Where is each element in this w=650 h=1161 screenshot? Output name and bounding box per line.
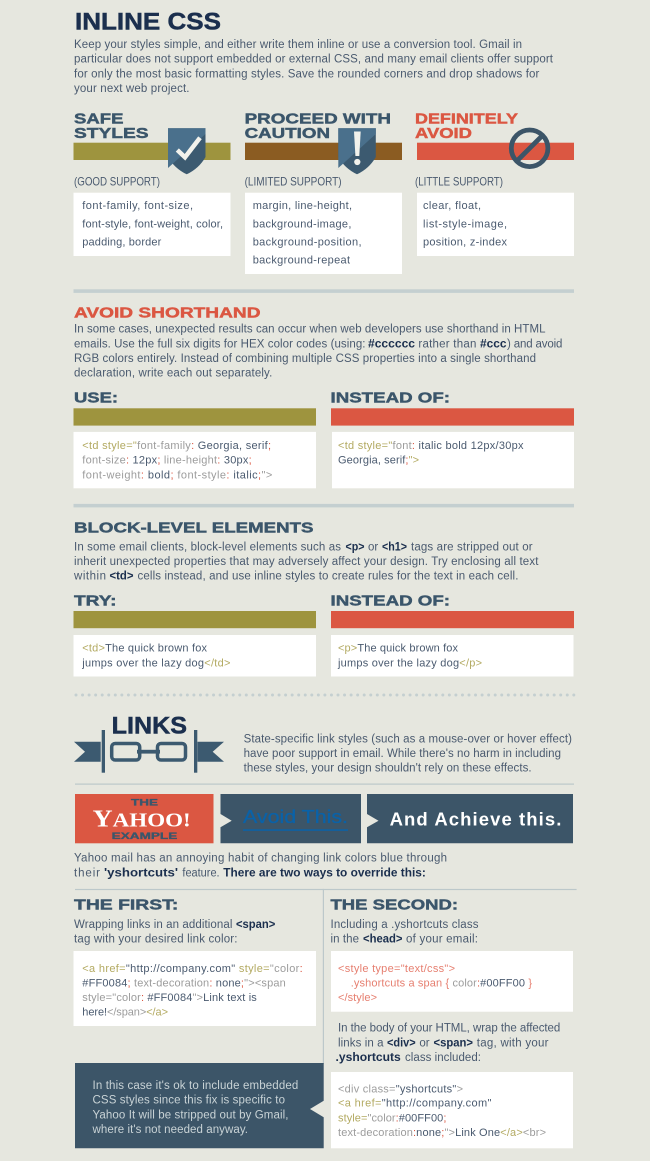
column: instead of: INSTEAD OF: xyxy=(330,390,450,406)
intro paragraph: your next web project. xyxy=(74,83,190,95)
column: instead of xyxy=(330,593,574,676)
paragraph: ) and avoid xyxy=(507,338,562,350)
paragraph xyxy=(74,324,562,380)
heading: proceed with caution: PROCEED WITH xyxy=(245,111,391,127)
paragraph: declaration, write each out separately. xyxy=(74,368,272,380)
paragraph: #cccccc xyxy=(368,338,416,350)
list box: list-style-image, xyxy=(423,218,507,230)
column: try: <td>The quick brown fox xyxy=(82,643,208,655)
paragraph: rather than xyxy=(418,338,476,350)
code box: div: style="color:#00FF00; xyxy=(338,1112,446,1124)
text block: class included: xyxy=(405,1052,481,1064)
code box: #FF0084; text-decoration: none;"><span xyxy=(82,977,286,989)
callout: embedded css note: where it's not needed anyway. xyxy=(92,1124,248,1136)
red bar xyxy=(417,143,574,160)
panel: yahoo logo: THE xyxy=(131,797,158,808)
text block xyxy=(336,1023,560,1064)
paragraph: tags are stripped out or xyxy=(411,541,533,553)
paragraph xyxy=(244,733,572,775)
text block: In the body of your HTML, wrap the affected xyxy=(338,1023,560,1035)
icon: shield with exclamation xyxy=(338,128,376,174)
panel: the second xyxy=(330,898,573,1148)
text block xyxy=(330,919,479,946)
callout: embedded css note: CSS styles since this fix is specific to xyxy=(92,1095,285,1107)
text block: <div> xyxy=(387,1037,416,1049)
list box: background-repeat xyxy=(253,254,350,266)
olive bar xyxy=(74,143,230,160)
label: good support: (GOOD SUPPORT) xyxy=(74,174,160,188)
column: use: USE: xyxy=(74,390,118,406)
code box xyxy=(74,951,316,1026)
column: try: TRY: xyxy=(74,593,116,609)
text block xyxy=(74,919,276,946)
heading: definitely avoid: DEFINITELY xyxy=(415,111,518,127)
paragraph: or xyxy=(368,541,378,553)
paragraph: State-specific link styles (such as a mouse-over or hover effect) xyxy=(244,733,572,745)
column: use: font-size: 12px; line-height: 30px; xyxy=(82,455,252,467)
list box xyxy=(245,193,402,274)
text block: <span> xyxy=(434,1037,473,1049)
panel: and achieve this xyxy=(367,794,573,843)
title: INLINE CSS xyxy=(75,8,221,35)
text block: tag, with your xyxy=(477,1037,549,1049)
icon: links banner with chain: LINKS xyxy=(112,712,187,740)
heading: the second: THE SECOND: xyxy=(330,898,458,914)
text block: Including a .yshortcuts class xyxy=(330,919,479,931)
panel: and achieve this: And Achieve this. xyxy=(390,809,561,830)
code box: div xyxy=(331,1072,573,1148)
brown bar xyxy=(245,143,402,160)
section: block-level elements xyxy=(73,520,574,676)
yahoo example banner xyxy=(75,794,573,843)
callout: embedded css note: In this case it's ok to include embedded xyxy=(92,1080,298,1092)
column: try: jumps over the lazy dog</td> xyxy=(81,657,230,669)
panel: the first xyxy=(74,898,316,1026)
panel: definitely avoid xyxy=(415,111,574,256)
column: try xyxy=(74,593,316,676)
column: instead of: jumps over the lazy dog</p> xyxy=(337,657,482,669)
text block: tag with your desired link color: xyxy=(74,934,238,946)
paragraph: <p> xyxy=(346,541,365,553)
icon: shield with check xyxy=(168,128,206,174)
column: instead of: INSTEAD OF: xyxy=(330,593,450,609)
code box: <a href="http://company.com" style="color: xyxy=(82,963,303,975)
heading: avoid shorthand: AVOID SHORTHAND xyxy=(74,306,260,322)
list box: margin, line-height, xyxy=(253,200,352,212)
heading: block-level elements: BLOCK-LEVEL ELEMENTS xyxy=(74,520,314,536)
paragraph: emails. Use the full six digits for HEX color codes (using: xyxy=(74,338,366,350)
column: instead of: <td style="font: italic bold 12px/30px xyxy=(338,440,524,452)
paragraph: have poor support in email. While there's no harm in including xyxy=(244,748,561,760)
column: instead of: <p>The quick brown fox xyxy=(338,643,458,655)
paragraph: within xyxy=(73,571,106,583)
text block: <span> xyxy=(236,919,276,931)
list box: background-image, xyxy=(253,218,351,230)
intro paragraph: particular does not support embedded or external CSS, and many email clients offer support xyxy=(74,54,554,66)
text block: Wrapping links in an additional xyxy=(74,919,232,931)
panel: yahoo logo: EXAMPLE xyxy=(112,831,177,842)
paragraph: these styles, your design shouldn't rely on these effects. xyxy=(244,763,532,775)
panel: proceed with caution xyxy=(245,111,402,274)
paragraph: <td> xyxy=(110,571,134,583)
paragraph: yahoo habit: their xyxy=(74,867,100,879)
text block: <head> xyxy=(363,934,403,946)
paragraph xyxy=(73,541,539,583)
column: use xyxy=(74,390,316,488)
code box: div: <div class="yshortcuts"> xyxy=(338,1083,463,1095)
paragraph: yahoo habit: 'yshortcuts' xyxy=(104,867,178,879)
section: avoid shorthand xyxy=(74,306,574,488)
text block: in the xyxy=(330,934,359,946)
list box xyxy=(74,193,230,256)
heading: safe styles: STYLES xyxy=(74,126,149,142)
label: limited support: (LIMITED SUPPORT) xyxy=(245,174,342,188)
heading: definitely avoid xyxy=(415,111,518,142)
column: use: <td style="font-family: Georgia, serif; xyxy=(82,440,271,452)
panel: yahoo logo xyxy=(75,794,214,843)
intro paragraph: Keep your styles simple, and either write them inline or use a conversion tool. Gmail in xyxy=(74,39,522,51)
code box: style: </style> xyxy=(338,992,377,1004)
paragraph: yahoo habit xyxy=(74,853,447,879)
section: links xyxy=(74,712,572,775)
paragraph: yahoo habit: feature. xyxy=(182,867,220,879)
heading: proceed with caution xyxy=(245,111,391,142)
heading: safe styles: SAFE xyxy=(74,111,124,127)
paragraph: RGB colors entirely. Instead of combining multiple CSS properties into a single shorthand xyxy=(74,353,536,365)
code box: style: <style type="text/css"> xyxy=(338,963,455,975)
panel: safe styles xyxy=(74,111,230,256)
paragraph: <h1> xyxy=(382,541,407,553)
column: use: font-weight: bold; font-style: italic;"> xyxy=(82,469,272,481)
list box: font-style, font-weight, color, xyxy=(82,218,223,230)
text block: of your email: xyxy=(406,934,478,946)
icon: prohibition sign xyxy=(511,130,548,167)
panel: avoid this xyxy=(220,794,361,843)
paragraph: #ccc xyxy=(480,338,507,350)
code box: style="color: #FF0084">Link text is xyxy=(82,992,257,1004)
column: instead of: Georgia, serif;"> xyxy=(338,455,419,467)
intro paragraph xyxy=(74,39,554,95)
icon: links banner with chain xyxy=(74,712,224,773)
code box: style: .yshortcuts a span { color:#00FF00 } xyxy=(351,977,532,989)
text block: .yshortcuts xyxy=(336,1052,401,1064)
code box: div: <a href="http://company.com" xyxy=(338,1098,491,1110)
code box: here!</span></a> xyxy=(82,1007,168,1019)
panel: avoid this: Avoid This. xyxy=(243,806,348,827)
heading: the first: THE FIRST: xyxy=(74,898,178,914)
paragraph: In some email clients, block-level elements such as xyxy=(74,541,341,553)
heading: safe styles xyxy=(74,111,149,142)
list box: padding, border xyxy=(82,236,162,248)
heading: proceed with caution: CAUTION xyxy=(245,126,330,142)
column: instead of xyxy=(330,390,574,488)
list box xyxy=(417,193,574,256)
list box: clear, float, xyxy=(423,200,481,212)
text block: or xyxy=(419,1037,430,1049)
paragraph: yahoo habit: There are two ways to override this: xyxy=(223,867,426,879)
paragraph: cells instead, and use inline styles to create rules for the text in each cell. xyxy=(138,571,518,583)
paragraph: In some cases, unexpected results can occur when web developers use shorthand in HTML xyxy=(74,324,546,336)
paragraph: inherit unexpected properties that may adversely affect your design. Try enclosing all text xyxy=(74,556,539,568)
list box: position, z-index xyxy=(423,236,508,248)
list box: background-position, xyxy=(253,236,362,248)
text block: links in a xyxy=(338,1037,384,1049)
code box: div: text-decoration:none;">Link One</a><br> xyxy=(338,1127,546,1139)
panel: yahoo logo: YAHOO! xyxy=(93,807,191,833)
heading: definitely avoid: AVOID xyxy=(415,126,472,142)
label: little support: (LITTLE SUPPORT) xyxy=(415,174,503,188)
code box: style xyxy=(331,951,573,1012)
callout: embedded css note: Yahoo It will be stripped out by Gmail, xyxy=(92,1109,288,1121)
callout: embedded css note xyxy=(75,1063,324,1148)
list box: font-family, font-size, xyxy=(82,200,193,212)
intro paragraph: for only the most basic formatting styles. Save the rounded corners and drop shadows for xyxy=(74,68,540,80)
paragraph: yahoo habit: Yahoo mail has an annoying habit of changing link colors blue through xyxy=(74,853,447,865)
